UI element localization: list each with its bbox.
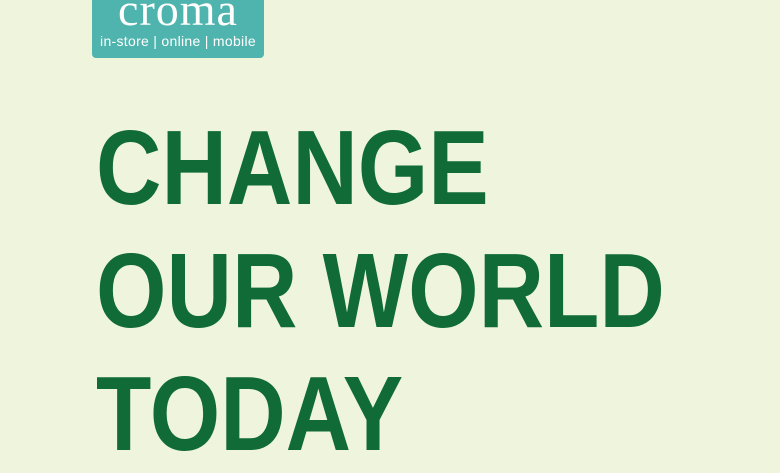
title line 3: TODAY [96,355,403,473]
logo: croma [92,0,264,58]
logo: croma: in-store | online | mobile [100,33,256,49]
title line 1: CHANGE [96,109,489,227]
title line 2: OUR WORLD [96,232,665,350]
